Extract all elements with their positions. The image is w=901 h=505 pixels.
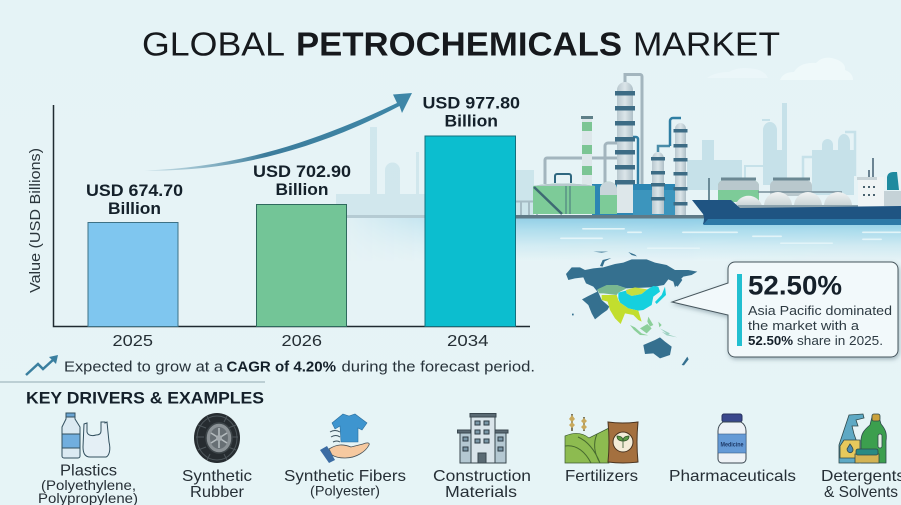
growth arrow [144,93,412,171]
CAGR text: Expected to grow at a [64,358,224,376]
icon: field and sack [565,414,638,463]
driver: construction materials [433,414,531,501]
CAGR text [64,358,535,376]
share description: the market with a [748,318,860,333]
share description [748,303,892,348]
bar 2025: Billion [108,200,161,218]
driver: fertilizers [565,414,638,485]
CAGR note [26,355,535,376]
tall column [615,82,635,213]
heading: key drivers: KEY DRIVERS & EXAMPLES [26,388,264,408]
pipes [545,74,642,184]
ground line [340,202,710,218]
share description: share in 2025. [797,333,883,348]
chimney [581,116,593,186]
label: Synthetic [182,468,252,485]
driver: synthetic rubber [182,413,252,501]
label: & Solvents [824,484,898,501]
driver: detergents and solvents [821,414,901,501]
bar 2025: USD 674.70 [86,182,183,200]
label: Plastics [60,462,117,480]
refinery [533,74,688,215]
label: Fertilizers [565,468,638,485]
label: Detergents [821,468,901,485]
bar 2034: Billion [444,112,498,130]
map: Asia Pacific [566,252,697,365]
bar 2026 [253,163,351,326]
x axis years [112,333,489,350]
second tall column [674,123,688,215]
title: GLOBAL [142,26,285,62]
label: Construction [433,468,531,485]
icon: spray and bottles [839,414,886,463]
label: Pharmaceuticals [669,468,796,485]
bar 2034 [422,94,520,326]
label: (Polyethylene, [41,478,136,493]
driver: plastics [38,413,138,505]
background skyline silhouettes [336,103,855,216]
icon: medicine bottle: Medicine [720,442,744,448]
title: PETROCHEMICALS [296,26,622,62]
bar 2026: USD 702.90 [253,163,351,181]
bar 2026: Billion [276,181,328,199]
share description: Asia Pacific dominated [748,303,892,318]
axes [54,105,530,326]
callout: Asia Pacific share [672,262,898,357]
x axis years: 2026 [282,333,322,350]
bar 2025 [86,182,183,326]
clouds [707,58,853,80]
icon: trend arrow [26,355,58,375]
bar 2034: USD 977.80 [422,94,520,112]
small column [651,152,665,214]
label: Rubber [190,484,245,501]
callout box [672,262,898,357]
label: Materials [445,484,517,501]
share description: 52.50% [748,333,793,348]
label: (Polyester) [310,482,380,498]
x axis years: 2034 [447,333,489,350]
x axis years: 2025 [112,333,153,350]
title: MARKET [633,26,780,62]
title [142,26,780,62]
label [38,462,138,505]
icon: tyre [194,413,240,463]
CAGR text: CAGR of 4.20% [226,358,336,376]
y axis label: Value (USD Billions) [28,148,44,293]
driver: synthetic fibers [284,414,406,498]
label: Synthetic Fibers [284,468,406,485]
label [284,468,406,498]
icon: shirt on hand [320,414,369,463]
icon: building [458,414,508,463]
bar chart [28,94,530,350]
driver: pharmaceuticals [669,414,796,485]
share figure: 52.50% [748,270,842,300]
icon: bottle and bag [62,413,110,458]
accent bar [737,274,742,346]
label [182,468,252,501]
CAGR text: during the forecast period. [342,358,535,376]
green tank [533,174,617,214]
label [433,468,531,501]
ship [692,158,901,225]
blue building [592,184,678,215]
sea band [354,218,901,256]
label [821,468,901,501]
